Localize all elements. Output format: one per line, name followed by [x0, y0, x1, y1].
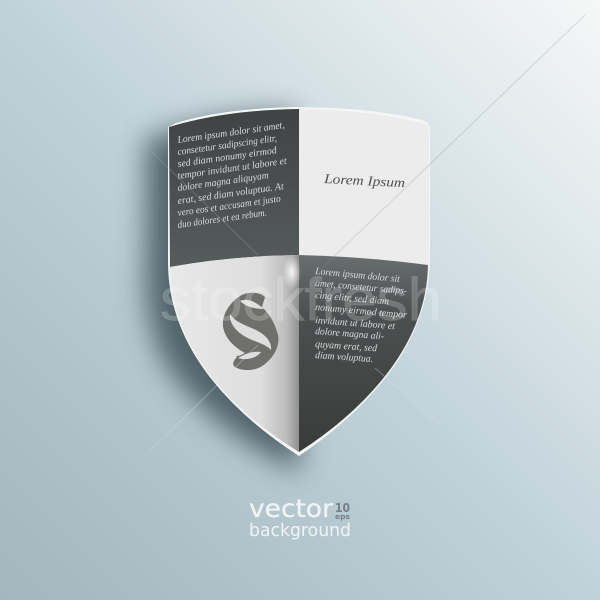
text block: top left: vero eos et accusam et justo [177, 194, 281, 219]
icon: section sign: § [230, 288, 270, 376]
shield [168, 107, 430, 456]
watermark [150, 15, 585, 451]
label: Lorem Ipsum: Lorem Ipsum [323, 171, 406, 190]
text block: bottom right: quyam erat, sed [315, 339, 378, 354]
text block: top left: duo dolores et ea rebum. [177, 208, 268, 231]
shield shadow [145, 114, 300, 472]
vector: vector [249, 494, 334, 523]
text block: top left: erat, sed diam voluptua. At [177, 181, 285, 207]
text block: top left [176, 120, 288, 231]
text block: bottom right: cing elitr, sed diam [315, 290, 389, 307]
fold highlight [283, 254, 301, 290]
text block: bottom right: invidunt ut labore et [315, 315, 396, 332]
text block: top left: consetetur sadipscing elitr, [177, 133, 277, 158]
footer logo: eps [335, 513, 350, 521]
text block: bottom right: diam voluptua. [315, 350, 373, 365]
text block: bottom right: Lorem ipsum dolor sit [314, 266, 401, 285]
text block: top left: dolore magna aliquyam [177, 170, 270, 194]
footer logo [249, 494, 351, 541]
watermark: stockfresh [160, 266, 442, 333]
background: background [249, 520, 351, 541]
panel: top left dark [169, 109, 299, 267]
panel: bottom left light [170, 255, 299, 452]
text block: bottom right: nonumy eirmod tempor [315, 302, 407, 321]
panel: bottom right dark [299, 255, 428, 452]
text block: top left: tempor invidunt ut labore et [177, 156, 288, 182]
text block: top left: sed diam nonumy eirmod [177, 145, 278, 170]
text block: bottom right [314, 266, 407, 365]
text block: bottom right: dolore magna ali- [315, 326, 384, 342]
text block: top left: Lorem ipsum dolor sit amet, [176, 120, 285, 146]
text block: bottom right: amet, consetetur sadips- [315, 278, 407, 297]
shield outline [168, 107, 430, 456]
10 eps: 10 [335, 501, 350, 515]
panel: top right light [299, 109, 429, 265]
